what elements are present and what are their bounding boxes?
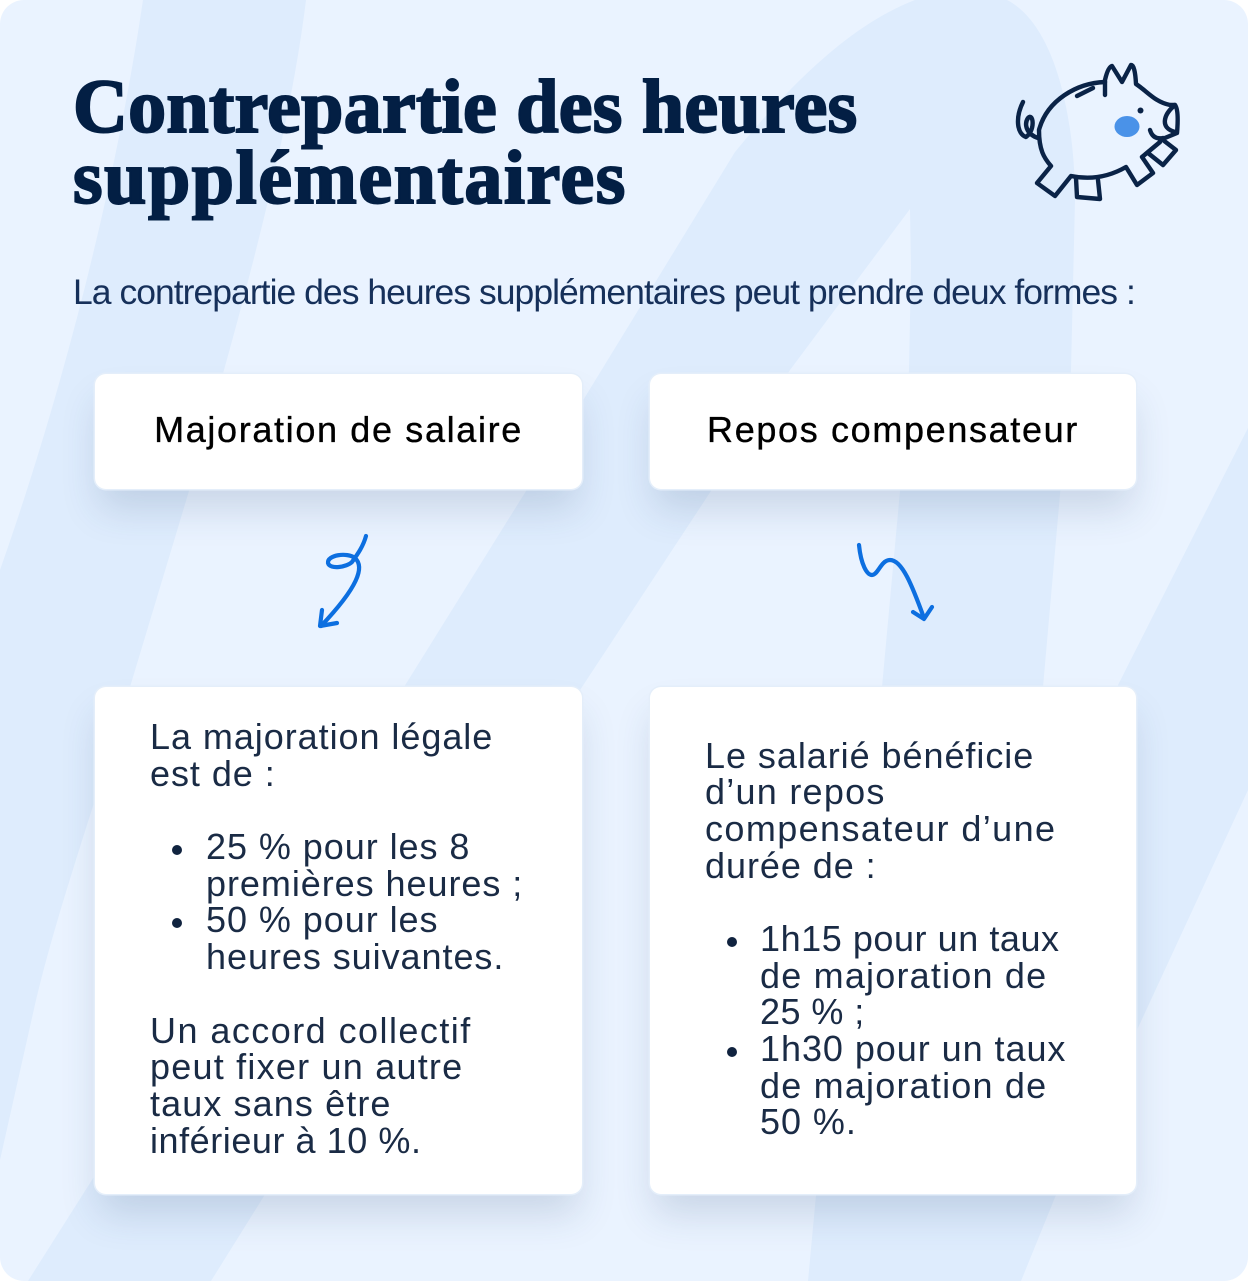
list: rates: heures suivantes. xyxy=(206,936,504,977)
text: compensatory rest intro: Le salarié bénéficie xyxy=(705,734,1034,776)
panel: repos compensateur heading xyxy=(650,374,1136,489)
panel: majoration de salaire heading: Majoration de salaire xyxy=(154,409,523,450)
text: compensatory rest intro: d’un repos xyxy=(705,771,886,812)
title xyxy=(73,65,857,220)
text: collective agreement: taux sans être xyxy=(150,1083,392,1124)
text: compensatory rest intro: durée de : xyxy=(705,845,877,886)
panel: majoration de salaire heading xyxy=(95,374,582,489)
panel: repos details xyxy=(650,687,1136,1194)
text: legal rate intro xyxy=(150,716,493,794)
list: durations xyxy=(727,918,1066,1142)
panel: repos compensateur heading: Repos compensateur xyxy=(707,409,1079,450)
list: rates: premières heures ; xyxy=(206,863,523,904)
list: durations: 1h15 pour un taux xyxy=(760,918,1060,959)
icon: piggy bank xyxy=(1016,62,1180,202)
title: supplémentaires xyxy=(73,136,627,220)
list: durations: 1h30 pour un taux xyxy=(760,1028,1066,1069)
list: durations: 25 % ; xyxy=(760,991,865,1032)
text: collective agreement: Un accord collectif xyxy=(150,1010,472,1050)
list: rates: 25 % pour les 8 xyxy=(206,826,470,867)
list: rates xyxy=(172,826,523,977)
list: durations: 50 %. xyxy=(760,1101,857,1142)
list: durations: de majoration de xyxy=(760,1065,1047,1106)
text: legal rate intro: La majoration légale xyxy=(150,716,493,757)
text: legal rate intro: est de : xyxy=(150,753,276,794)
text: compensatory rest intro: compensateur d’une xyxy=(705,808,1056,849)
title: Contrepartie des heures xyxy=(73,65,857,149)
list: rates: 50 % pour les xyxy=(206,899,438,940)
intro text: La contrepartie des heures supplémentaires peut prendre deux formes : xyxy=(73,272,1135,312)
arrow: left curl arrow xyxy=(318,534,368,628)
arrow: right wavy arrow xyxy=(856,542,934,622)
panel: majoration details xyxy=(95,687,582,1194)
list: durations: de majoration de xyxy=(760,955,1047,996)
text: compensatory rest intro xyxy=(705,734,1056,886)
text: collective agreement xyxy=(150,1010,472,1161)
text: collective agreement: inférieur à 10 %. xyxy=(150,1120,422,1161)
text: collective agreement: peut fixer un autre xyxy=(150,1046,463,1087)
